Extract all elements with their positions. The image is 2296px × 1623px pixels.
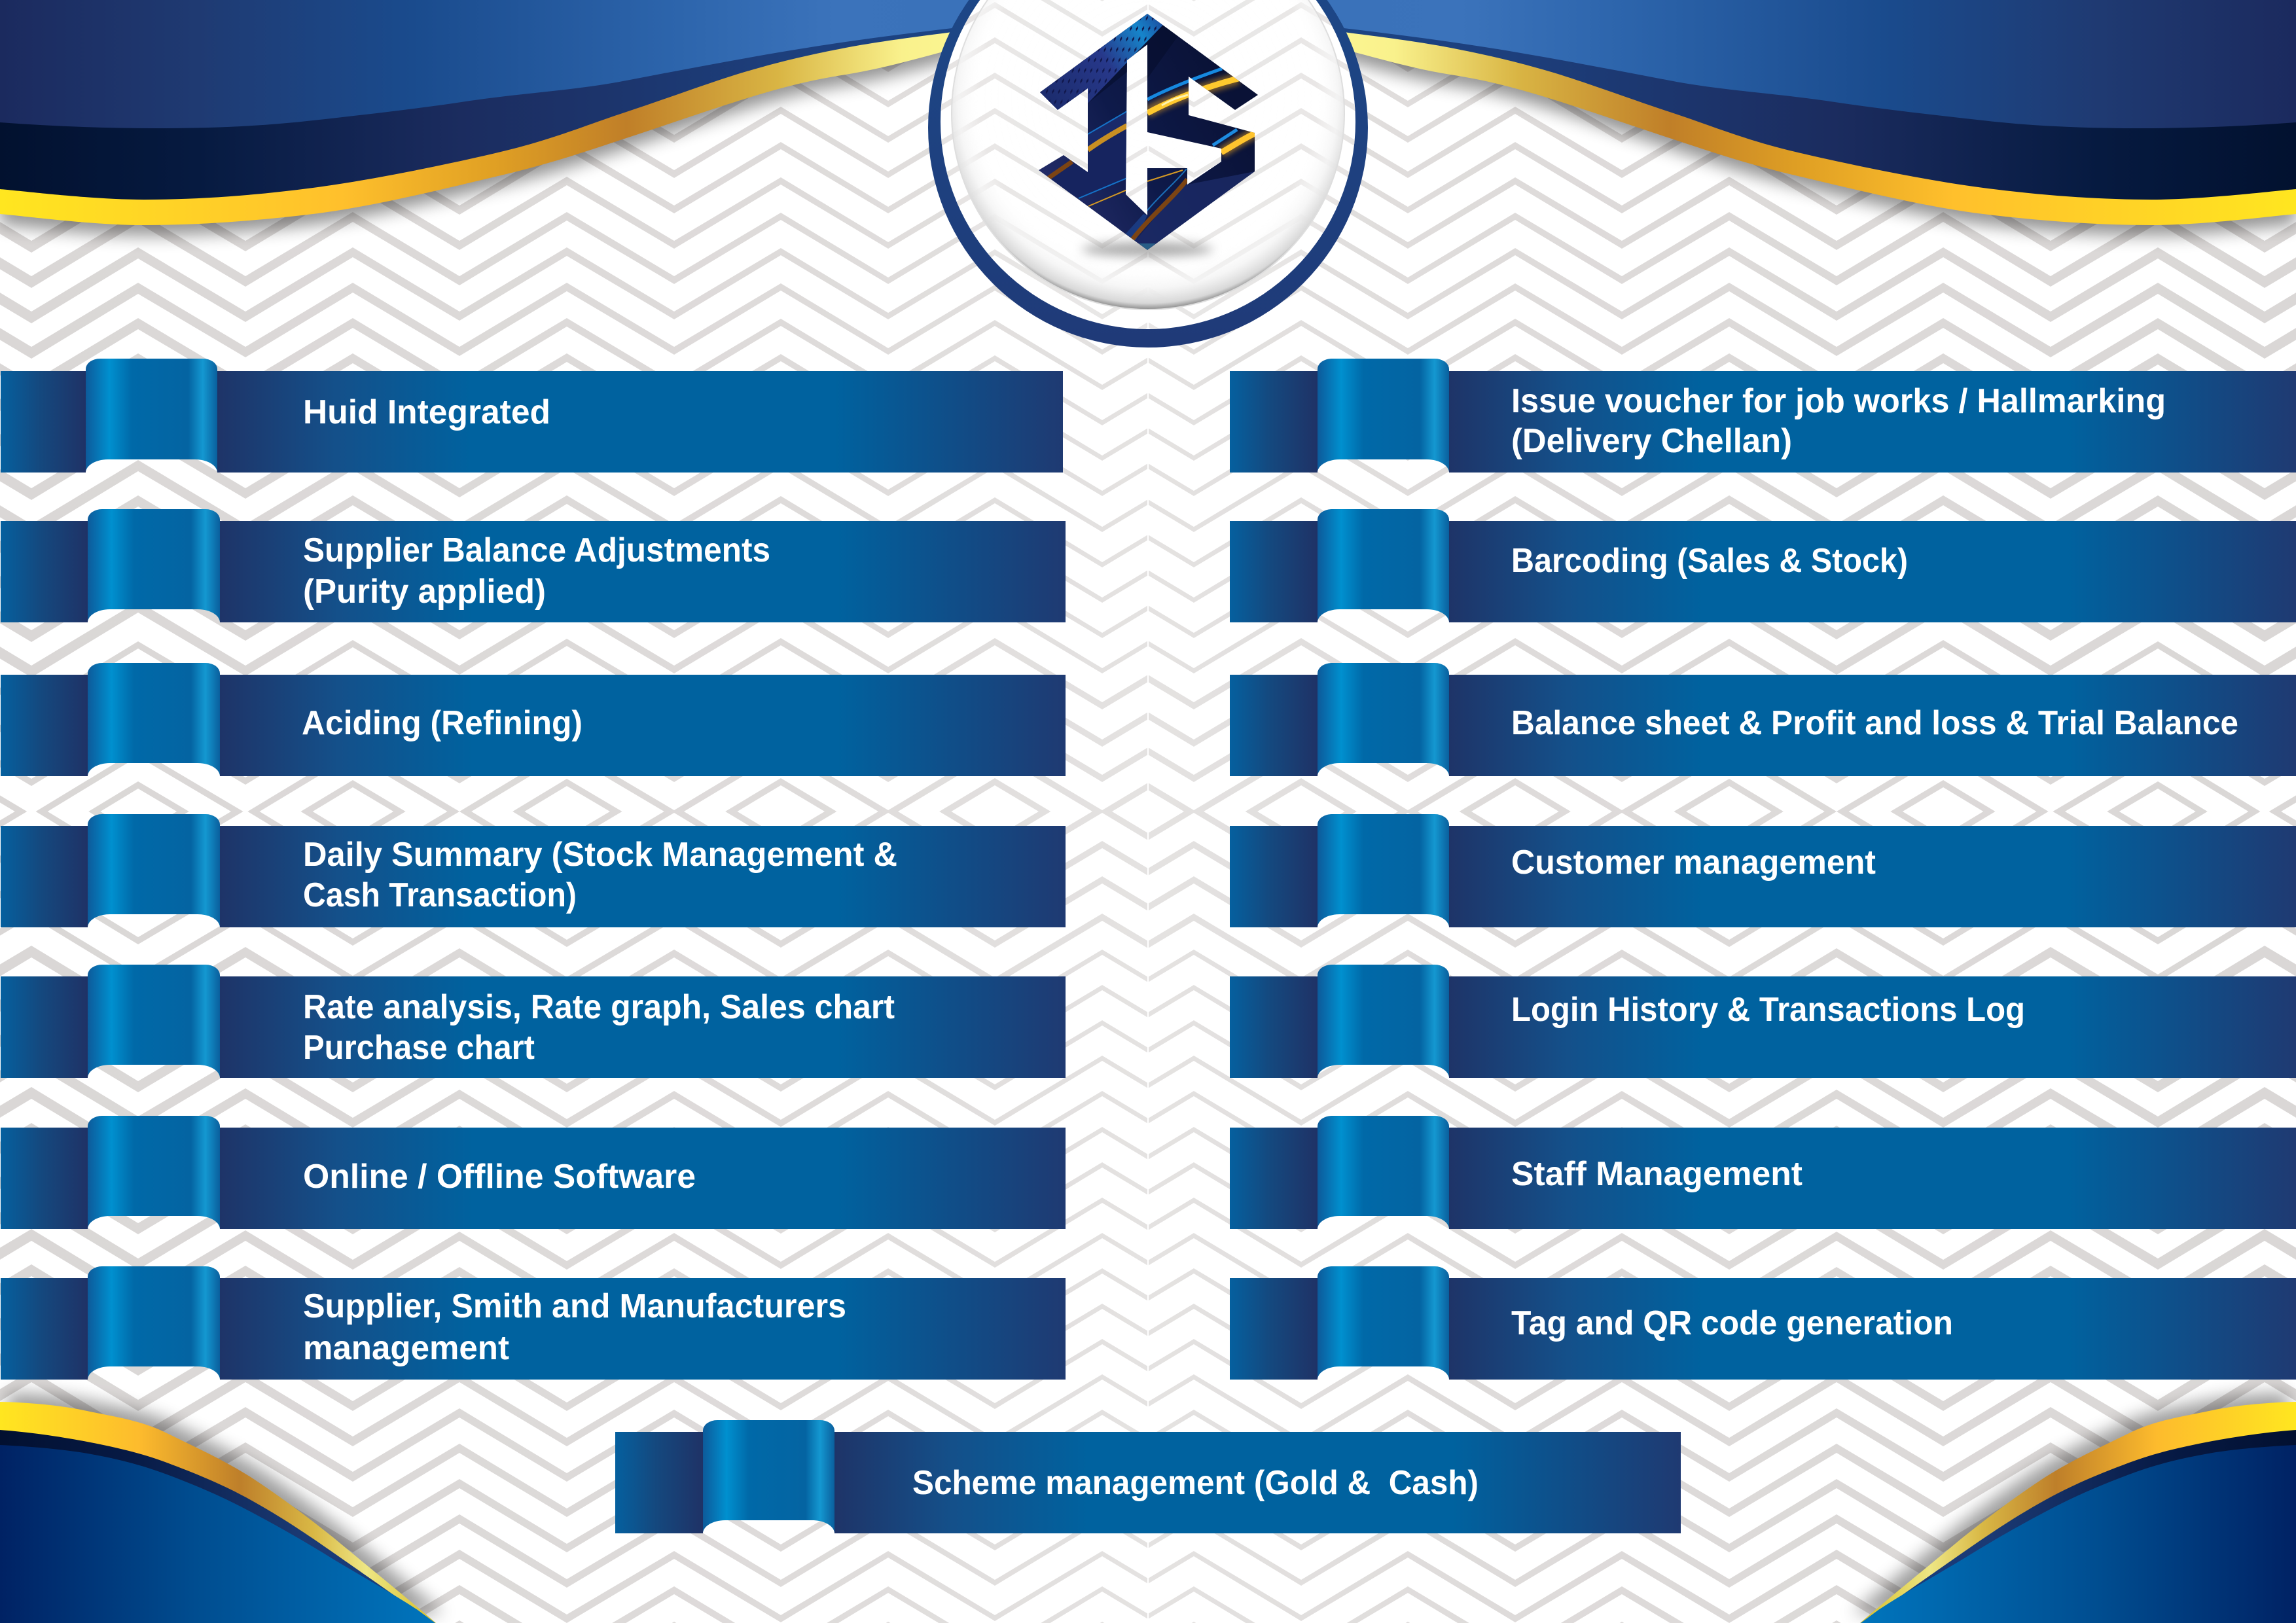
ribbon fold	[703, 1420, 834, 1533]
ribbon: Huid Integrated	[1, 359, 1063, 473]
logo shadow	[1082, 242, 1213, 257]
bar segments	[1230, 1278, 2296, 1380]
JS logo diamond	[1034, 10, 1260, 253]
logo medallion	[928, 0, 1368, 348]
label: Online / Offline Software	[303, 1158, 696, 1196]
bar segments	[1, 675, 1066, 776]
ribbon: Tag and QR code generation	[1230, 1266, 2296, 1380]
label: Daily Summary (Stock Management &	[303, 836, 897, 874]
bar segments	[1, 521, 1066, 622]
ribbon fold	[88, 663, 220, 776]
navy ring	[928, 0, 1368, 348]
label	[1511, 382, 2166, 460]
label: Login History & Transactions Log	[1511, 991, 2025, 1029]
blue wave band	[0, 0, 995, 128]
bar segments	[1230, 1128, 2296, 1229]
label: Customer management	[1511, 844, 1876, 882]
ribbon: Online / Offline Software	[1, 1116, 1066, 1229]
bar segments	[1230, 976, 2296, 1078]
gold corner band	[0, 1402, 436, 1623]
ribbon: Login History	[1230, 965, 2296, 1078]
label: (Delivery Chellan)	[1511, 422, 1792, 460]
bottom-left corner wave	[0, 1393, 444, 1623]
ribbon: Customer management	[1230, 814, 2296, 927]
label: Supplier, Smith and Manufacturers	[303, 1287, 846, 1325]
ribbon fold	[88, 1116, 220, 1229]
gold wave band right	[1301, 0, 2296, 225]
ribbon: Scheme management	[615, 1420, 1681, 1533]
label: Purchase chart	[303, 1029, 535, 1067]
bar segments	[1, 371, 1063, 473]
label	[303, 531, 770, 611]
bar segments	[1, 976, 1066, 1078]
top-right wave	[1301, 0, 2296, 236]
gold corner band right	[1860, 1402, 2296, 1623]
label: Issue voucher for job works / Hallmarking	[1511, 382, 2166, 420]
ribbon fold	[88, 1266, 220, 1380]
ribbon: Aciding (Refining)	[1, 663, 1066, 776]
label: Rate analysis, Rate graph, Sales chart	[303, 988, 895, 1026]
ribbon fold	[1318, 965, 1449, 1078]
bar segments	[1230, 371, 2296, 473]
navy corner band right	[1862, 1430, 2296, 1623]
label: Aciding (Refining)	[302, 704, 583, 742]
bar segments	[1230, 521, 2296, 622]
bar segments	[1, 1278, 1066, 1380]
navy corner band	[0, 1430, 434, 1623]
ribbon: Daily Summary	[1, 814, 1066, 927]
blue wave band right	[1301, 0, 2296, 128]
bottom-right corner wave	[1852, 1393, 2296, 1623]
label: Scheme management (Gold & Cash)	[912, 1464, 1479, 1502]
bar segments	[1, 826, 1066, 927]
ribbon: Barcoding	[1230, 509, 2296, 622]
label: Huid Integrated	[303, 393, 550, 431]
ribbon: Supplier Balance Adjustments	[1, 509, 1066, 622]
label: Cash Transaction)	[303, 876, 577, 914]
navy wave band	[0, 0, 995, 200]
ribbon fold	[88, 965, 220, 1078]
label: management	[303, 1329, 509, 1367]
ribbon: Supplier, Smith and Manufacturers	[1, 1266, 1066, 1380]
ribbon: Rate analysis	[1, 965, 1066, 1078]
ribbon fold	[1318, 1116, 1449, 1229]
raised white dome	[952, 0, 1344, 310]
ribbon fold	[88, 509, 220, 622]
bar segments	[615, 1432, 1681, 1533]
ribbon: Staff Management	[1230, 1116, 2296, 1229]
ribbon fold	[1318, 663, 1449, 776]
navy wave band right	[1301, 0, 2296, 200]
ribbon fold	[1318, 359, 1449, 473]
label: Staff Management	[1511, 1155, 1803, 1193]
bar segments	[1, 1128, 1066, 1229]
ribbon: Balance sheet	[1230, 663, 2296, 776]
label	[303, 836, 897, 914]
gold wave band	[0, 0, 995, 225]
ribbon fold	[1318, 1266, 1449, 1380]
label: Supplier Balance Adjustments	[303, 531, 770, 569]
bar segments	[1230, 826, 2296, 927]
ribbon fold	[1318, 509, 1449, 622]
blue corner shape right	[1861, 1445, 2296, 1623]
label: Barcoding (Sales & Stock)	[1511, 542, 1908, 580]
bar segments	[1230, 675, 2296, 776]
ribbon fold	[1318, 814, 1449, 927]
label: Balance sheet & Profit and loss & Trial Balance	[1511, 704, 2238, 742]
label: Tag and QR code generation	[1511, 1304, 1953, 1342]
blue corner shape	[0, 1445, 435, 1623]
label	[303, 1287, 846, 1367]
label: (Purity applied)	[303, 573, 546, 611]
label	[303, 988, 895, 1067]
ribbon fold	[88, 814, 220, 927]
top-left wave	[0, 0, 995, 236]
ribbon: Issue voucher	[1230, 359, 2296, 473]
ribbon fold	[86, 359, 217, 473]
